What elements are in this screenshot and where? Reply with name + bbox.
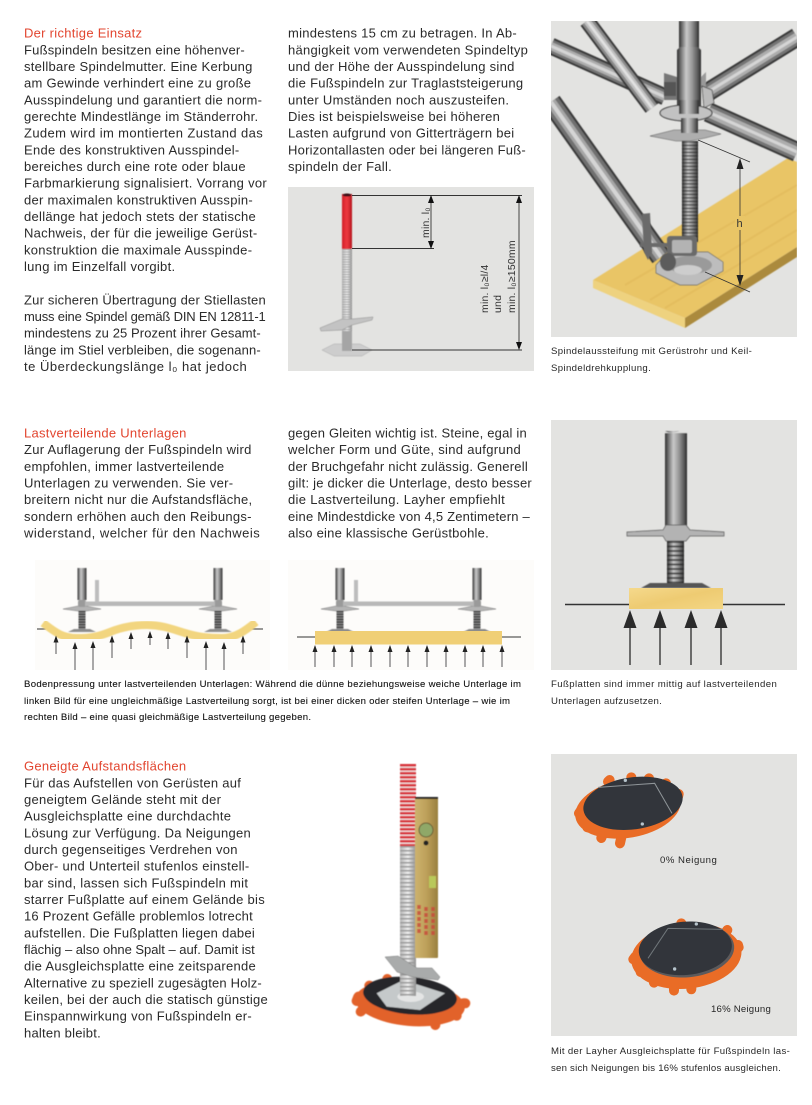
text block: Unterlagen, column 2: gegen Gleiten wichtig ist. Steine, egal in xyxy=(288,426,527,440)
wooden plank xyxy=(593,158,797,328)
text block: intro paragraph xyxy=(24,42,267,374)
text block: inclined surfaces paragraph: halten bleibt. xyxy=(24,1025,101,1040)
section: Geneigte Aufstandsflächen xyxy=(24,758,268,1040)
caption: Fußplatten xyxy=(551,679,777,707)
text block: intro paragraph: Ausspindelung und garantiert die norm- xyxy=(24,92,262,107)
text block: intro paragraph: Farbmarkierung signalisiert. Vorrang vor xyxy=(24,176,267,191)
text block: intro paragraph: Ende des konstruktiven Ausspindel- xyxy=(24,142,239,157)
caption: Bodenpressung: Bodenpressung unter lastverteilenden Unterlagen: Während die dünne beziehungsweise weiche Unterlage im xyxy=(24,679,521,690)
text block: inclined surfaces paragraph: Einspannwirkung von Fußspindeln er- xyxy=(24,1009,252,1024)
uneven load arrows xyxy=(54,631,246,670)
text block: inclined surfaces paragraph: bar sind, lassen sich Fußspindeln mit xyxy=(24,875,248,890)
base plate and coupler xyxy=(640,213,723,285)
text block: intro paragraph: konstruktion die maximale Ausspinde- xyxy=(24,242,252,257)
spirit level xyxy=(415,797,438,958)
caption: Ausgleichsplatte xyxy=(551,1046,790,1074)
text block: inclined surfaces paragraph: Lösung zur Verfügung. Da Neigungen xyxy=(24,825,251,840)
text block: load distribution paragraph: breitern nicht nur die Aufstandsfläche, xyxy=(24,492,252,507)
caption: Bodenpressung: linken Bild für eine ungleichmäßige Lastverteilung sorgt, ist bei einer dicken oder steifen Unterlage – wie im xyxy=(24,696,510,707)
icon: scaffold frame xyxy=(321,568,496,632)
icon: plate 16 percent xyxy=(628,918,745,994)
caption: Ausgleichsplatte: sen sich Neigungen bis 16% stufenlos ausgleichen. xyxy=(551,1063,781,1074)
dimension h: h xyxy=(736,218,743,230)
text block: load distribution paragraph: empfohlen, immer lastverteilende xyxy=(24,459,224,474)
text block: inclined surfaces paragraph: aufstellen. Die Fußplatten liegen dabei xyxy=(24,925,255,940)
text block: intro paragraph: länge im Stiel verbleiben, die sogenann- xyxy=(24,342,261,357)
icon: plate 0 percent xyxy=(570,770,686,846)
dimension labels: min. l₀≥150mm xyxy=(506,240,518,313)
caption: Spindelaussteifung: Spindelaussteifung mit Gerüstrohr und Keil- xyxy=(551,346,752,357)
dimension lines and arrows xyxy=(352,195,522,350)
dimension labels: min. l₀≥l/4 xyxy=(479,264,491,313)
dimension h xyxy=(698,140,750,292)
text block: intro paragraph: Zudem wird im montierten Zustand das xyxy=(24,126,263,141)
text block: Unterlagen, column 2: eine Mindestdicke von 4,5 Zentimetern – xyxy=(288,509,530,524)
text block: Unterlagen, column 2: die Lastverteilung. Layher empfiehlt xyxy=(288,492,505,507)
dimension labels: min. l₀ xyxy=(420,207,432,238)
text block: Unterlagen, column 2 xyxy=(287,426,532,540)
threaded spindle xyxy=(400,764,416,996)
text block: intro paragraph: mindestens zu 25 Prozent ihrer Gesamt- xyxy=(24,326,261,341)
caption: Bodenpressung: rechten Bild – eine quasi gleichmäßige Lastverteilung gegeben. xyxy=(24,712,311,723)
panel: base plate centred on plank xyxy=(551,420,797,670)
panel: spindle dimension diagram xyxy=(288,187,534,371)
caption: Fußplatten: Fußplatten sind immer mittig auf lastverteilenden xyxy=(551,679,777,690)
plank xyxy=(629,588,723,609)
text block: inclined surfaces paragraph: durch gegenseitiges Verdrehen von xyxy=(24,842,238,857)
text block: Einsatz, column 2: und der Höhe der Ausspindelung sind xyxy=(288,59,515,74)
text block: Einsatz, column 2: Dies ist beispielsweise bei höheren xyxy=(288,109,500,124)
text block: inclined surfaces paragraph: Ober- und Unterteil stufenlos einstell- xyxy=(24,859,250,874)
section: Lastverteilende Unterlagen, column 1 xyxy=(23,426,260,540)
text block: intro paragraph: Nachweis, der für die jeweilige Gerüst- xyxy=(24,226,257,241)
diagram: thick stiff base with even load distribution xyxy=(288,560,534,670)
text block: intro paragraph: dellänge hat jedoch stets der statische xyxy=(24,209,256,224)
text block: Einsatz, column 2: spindeln der Fall. xyxy=(288,159,392,174)
section: Der richtige Einsatz, column 1 xyxy=(24,26,267,374)
text block: intro paragraph: Zur sicheren Übertragung der Stiellasten xyxy=(24,292,266,307)
wavy plank xyxy=(43,622,256,638)
threaded spindle xyxy=(682,141,698,242)
text block: load distribution paragraph xyxy=(23,442,260,540)
text block: inclined surfaces paragraph: starrer Fußplatte auf einem Gelände bis xyxy=(24,892,265,907)
text block: Unterlagen, column 2: welcher Form und Güte, sind aufgrund xyxy=(287,442,521,457)
text block: Unterlagen, column 2: also eine klassische Gerüstbohle. xyxy=(288,526,489,540)
text block: inclined surfaces paragraph: Für das Aufstellen von Gerüsten auf xyxy=(24,775,241,790)
orange levelling plate xyxy=(353,973,467,1031)
heading: Geneigte Aufstandsflächen: Geneigte Aufstandsflächen xyxy=(24,758,186,774)
text block: load distribution paragraph: Unterlagen zu verwenden. Sie ver- xyxy=(24,476,233,490)
text block: Einsatz, column 2: die Fußspindeln zur Traglaststeigerung xyxy=(288,76,523,91)
thick plank xyxy=(315,631,502,644)
caption: Bodenpressung xyxy=(24,679,521,723)
diagram: thin soft base with uneven load distribution xyxy=(35,560,270,670)
text block: Unterlagen, column 2: der Bruchgefahr nicht zulässig. Generell xyxy=(288,459,528,474)
label: 0% Neigung: 0% Neigung xyxy=(660,855,717,866)
text block: Einsatz, column 2 xyxy=(288,26,528,174)
text block: inclined surfaces paragraph: Alternative zu speziell zugesägten Holz- xyxy=(24,975,262,990)
icon: scaffold frame xyxy=(63,568,237,632)
text block: intro paragraph: muss eine Spindel gemäß DIN EN 12811-1 xyxy=(24,309,266,324)
even load arrows xyxy=(312,645,504,667)
heading: Der richtige Einsatz: Der richtige Einsatz xyxy=(24,26,142,40)
text block: intro paragraph: der maximalen konstruktiven Ausspin- xyxy=(24,192,253,207)
text block: intro paragraph: bereiches durch eine rote oder blaue xyxy=(24,159,246,174)
scaffold tubes xyxy=(551,21,797,257)
wing nut xyxy=(385,956,440,980)
text block: Unterlagen, column 2: gilt: je dicker die Unterlage, desto besser xyxy=(288,476,532,490)
caption: Spindelaussteifung xyxy=(551,346,752,374)
text block: Einsatz, column 2: mindestens 15 cm zu betragen. In Ab- xyxy=(288,26,517,40)
text block: Einsatz, column 2: unter Umständen noch auszusteifen. xyxy=(288,92,509,107)
caption: Spindelaussteifung: Spindeldrehkupplung. xyxy=(551,363,651,374)
text block: inclined surfaces paragraph: die Ausgleichsplatte eine zeitsparende xyxy=(24,959,256,974)
text block: Einsatz, column 2: Horizontallasten oder bei längeren Fuß- xyxy=(288,142,526,157)
text block: inclined surfaces paragraph: Ausgleichsplatte eine durchdachte xyxy=(24,809,231,824)
text block: Einsatz, column 2: Lasten aufgrund von Gitterträgern bei xyxy=(288,126,514,141)
text block: inclined surfaces paragraph: 16 Prozent Gefälle problemlos lotrecht xyxy=(24,909,253,924)
text block: load distribution paragraph: sondern erhöhen auch den Reibungs- xyxy=(24,509,252,524)
text block: intro paragraph: te Überdeckungslänge l₀ hat jedoch xyxy=(24,359,247,374)
text block: intro paragraph: Fußspindeln besitzen eine höhenver- xyxy=(24,42,245,57)
caption: Ausgleichsplatte: Mit der Layher Ausgleichsplatte für Fußspindeln las- xyxy=(551,1046,790,1057)
text block: intro paragraph: gerechte Mindestlänge im Ständerrohr. xyxy=(24,109,258,124)
heading: Lastverteilende Unterlagen: Lastverteilende Unterlagen xyxy=(24,426,187,440)
main standard and rosette xyxy=(650,21,721,141)
text block: Einsatz, column 2: hängigkeit vom verwendeten Spindeltyp xyxy=(288,42,528,57)
caption: Fußplatten: Unterlagen aufzusetzen. xyxy=(551,696,662,707)
dimension labels: und xyxy=(492,295,504,313)
panel: braced spindle illustration xyxy=(551,21,797,337)
text block: inclined surfaces paragraph: keilen, bei der auch die statisch günstige xyxy=(24,992,268,1007)
text block: intro paragraph: lung im Einzelfall vorgibt. xyxy=(24,259,175,274)
icon: threaded spindle with red marking xyxy=(320,194,373,356)
icon: spindle on plank xyxy=(627,431,724,588)
dimension labels xyxy=(420,207,518,313)
text block: inclined surfaces paragraph xyxy=(24,775,268,1040)
text block: intro paragraph: stellbare Spindelmutter. Eine Kerbung xyxy=(24,59,253,74)
text block: inclined surfaces paragraph: flächig – also ohne Spalt – auf. Damit ist xyxy=(24,942,255,957)
panel: levelling plate at two inclinations xyxy=(551,754,797,1036)
illustration: spindle with spirit level on levelling plate xyxy=(353,764,467,1031)
text block: intro paragraph: am Gewinde verhindert eine zu große xyxy=(24,76,251,91)
text block: load distribution paragraph: Zur Auflagerung der Fußspindeln wird xyxy=(24,442,252,457)
ground line xyxy=(565,604,785,606)
load arrows xyxy=(624,610,728,665)
label: 16% Neigung: 16% Neigung xyxy=(711,1004,771,1015)
text block: inclined surfaces paragraph: geneigtem Gelände steht mit der xyxy=(24,792,222,807)
text block: load distribution paragraph: widerstand, welcher für den Nachweis xyxy=(23,526,260,540)
